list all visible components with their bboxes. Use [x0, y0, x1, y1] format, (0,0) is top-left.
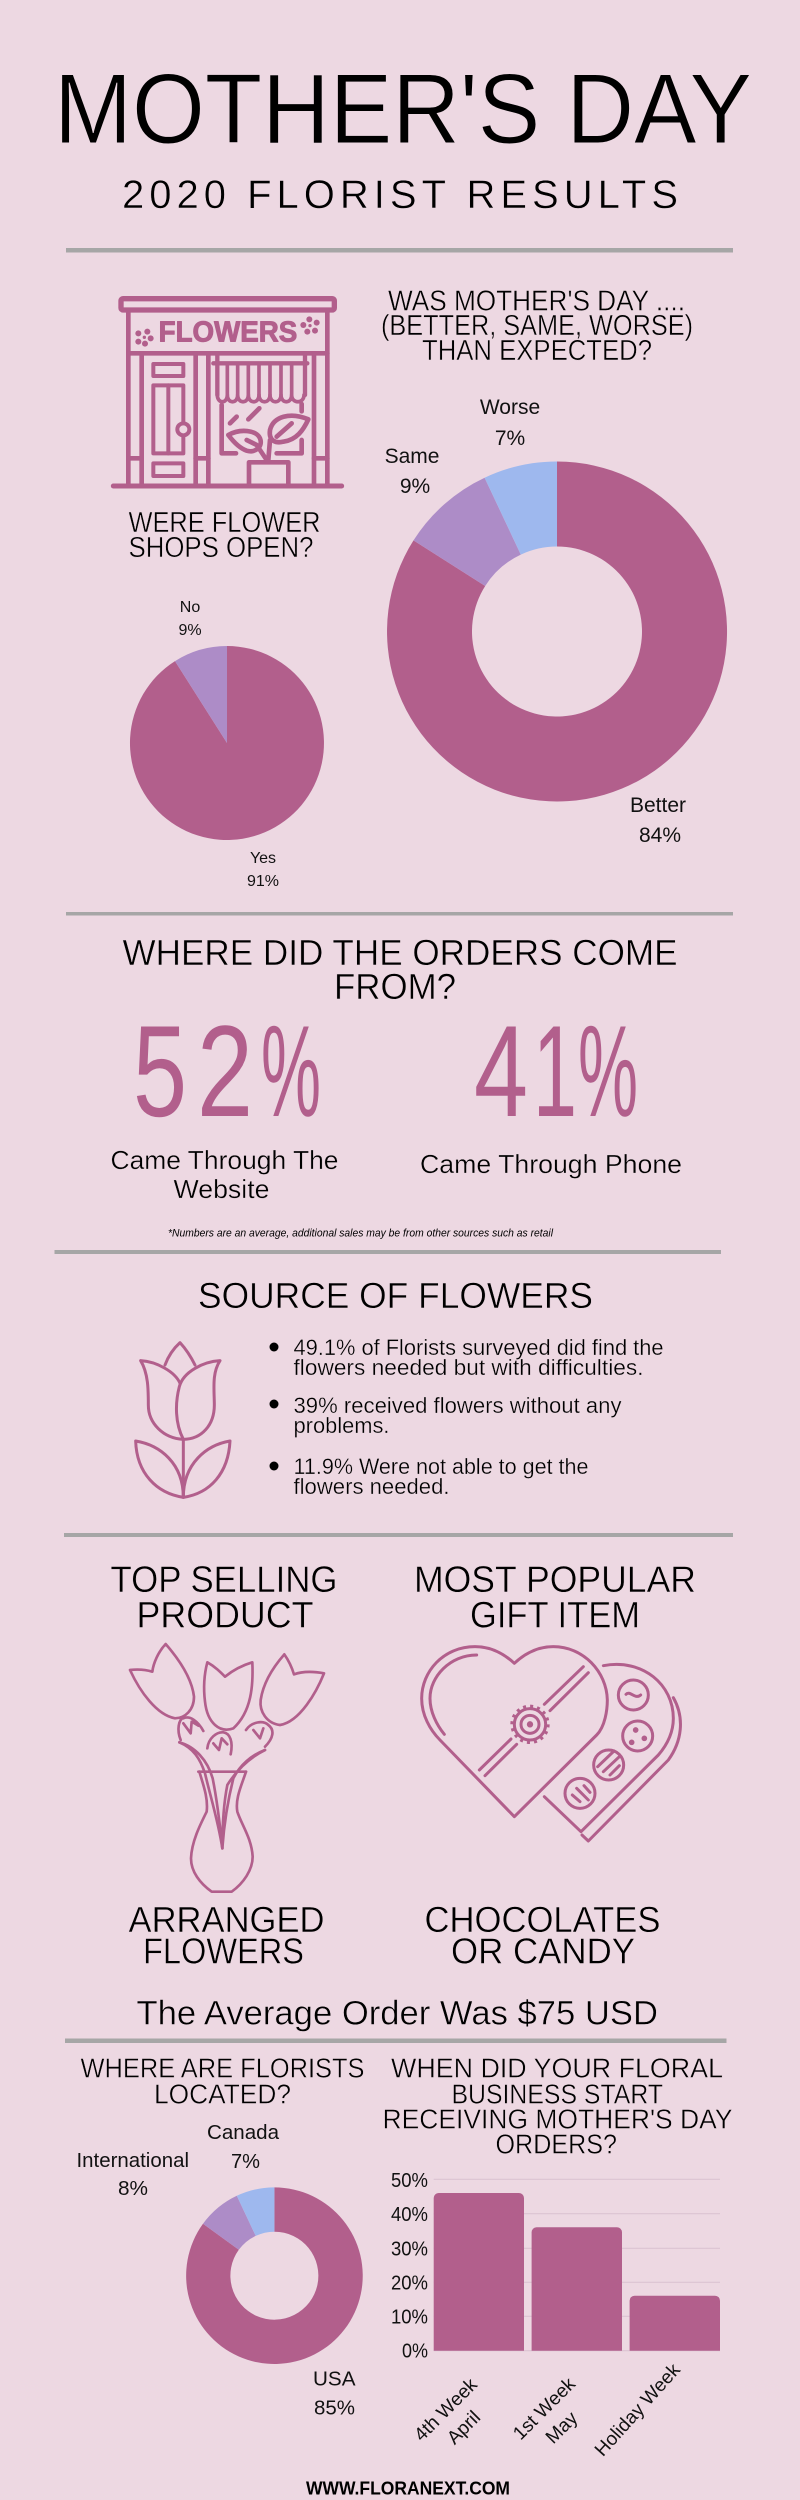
heading: most popular gift item: GIFT ITEM — [470, 1594, 640, 1636]
pie chart: shops open — [130, 599, 324, 890]
label: came through phone: Came Through Phone — [420, 1149, 682, 1179]
donut chart: locations: 7% — [231, 2150, 260, 2173]
bullet list: flowers needed but with difficulties. — [294, 1355, 644, 1380]
heading: when did your floral business start: BUSINESS START — [452, 2078, 663, 2110]
bar chart: 4th Week — [410, 2374, 482, 2446]
panel: when orders started — [382, 2052, 733, 2461]
stat: 41 percent — [474, 998, 638, 1144]
heading: where did the orders come from: FROM? — [334, 966, 456, 1007]
bullet list: 49.1% of Florists surveyed did find the — [294, 1335, 664, 1360]
donut chart: better same worse: 84% — [639, 824, 681, 847]
bullet list: flowers needed. — [294, 1474, 450, 1499]
donut chart: better same worse — [385, 396, 727, 847]
panel: where orders came from — [110, 932, 682, 1240]
bar chart: 30% — [391, 2238, 428, 2260]
label: came through the website: Came Through The — [110, 1145, 338, 1175]
pie chart: shops open: No — [180, 599, 200, 616]
label: arranged flowers: ARRANGED — [128, 1899, 324, 1940]
heading: when did your floral business start: ORDERS? — [496, 2128, 617, 2160]
bar chart: May — [542, 2408, 583, 2448]
pie chart: shops open: Yes — [250, 850, 276, 867]
bullet list: 11.9% Were not able to get the — [294, 1454, 588, 1479]
donut chart: locations — [76, 2121, 363, 2420]
footer url: WWW.FLORANEXT.COM — [306, 2478, 510, 2498]
icon: flower shop: FLOWERS — [159, 316, 297, 348]
bar chart: 1st Week — [509, 2373, 580, 2444]
label: arranged flowers: FLOWERS — [143, 1930, 304, 1972]
heading: where did the orders come from: WHERE DID THE ORDERS COME — [122, 932, 678, 973]
bullet list: problems. — [294, 1413, 390, 1438]
donut chart: locations: 85% — [314, 2396, 355, 2420]
stat: 41 percent: 1 — [533, 998, 577, 1144]
panel: flower shops open — [113, 299, 342, 890]
label: chocolates or candy: OR CANDY — [451, 1930, 635, 1972]
heading: was mother's day: THAN EXPECTED? — [422, 335, 652, 367]
label: arranged flowers — [128, 1899, 324, 1972]
heading: top selling product: PRODUCT — [136, 1594, 314, 1636]
icon: flower shop — [113, 299, 342, 486]
bar chart: April — [443, 2407, 485, 2449]
bullet list — [270, 1335, 664, 1499]
donut chart: better same worse: Better — [630, 794, 686, 817]
heading: when did your floral business start — [382, 2052, 733, 2160]
bar chart: 0% — [402, 2340, 428, 2362]
icon: arranged flowers vase — [130, 1644, 324, 1892]
bar chart — [391, 2170, 720, 2461]
heading: most popular gift item: MOST POPULAR — [414, 1559, 696, 1600]
panel: better same worse — [381, 286, 727, 847]
heading: where are florists located: LOCATED? — [154, 2078, 291, 2110]
panel: source of flowers — [136, 1275, 664, 1499]
title: MOTHER'S DAY — [54, 53, 752, 164]
label: chocolates or candy — [424, 1899, 660, 1972]
donut chart: locations: Canada — [207, 2121, 280, 2144]
label: chocolates or candy: CHOCOLATES — [424, 1899, 660, 1940]
heading: was mother's day — [381, 286, 693, 367]
pie chart: shops open: 9% — [178, 622, 202, 639]
heading: when did your floral business start: WHEN DID YOUR FLORAL — [391, 2052, 723, 2084]
footnote: *Numbers are an average, additional sales may be from other sources such as retail — [168, 1228, 554, 1240]
bar chart: Holiday Week — [591, 2360, 685, 2461]
heading: was mother's day: (BETTER, SAME, WORSE) — [381, 310, 693, 342]
heading: was mother's day: WAS MOTHER'S DAY .... — [388, 286, 685, 318]
donut chart: better same worse: 7% — [495, 427, 525, 450]
heading: were flower shops open: WERE FLOWER — [128, 507, 320, 539]
bullet list: 39% received flowers without any — [294, 1393, 622, 1418]
heading: source of flowers: SOURCE OF FLOWERS — [198, 1275, 593, 1316]
panel: top selling product — [110, 1559, 338, 1972]
stat: 52 percent: 5 — [133, 998, 187, 1144]
donut chart: better same worse: Worse — [480, 396, 540, 419]
heading: were flower shops open — [128, 507, 320, 564]
pie chart: shops open: 91% — [247, 873, 279, 890]
donut chart: locations: International — [76, 2149, 189, 2172]
donut chart: better same worse: Same — [385, 445, 439, 468]
heading: where are florists located — [80, 2052, 364, 2110]
heading: where are florists located: WHERE ARE FLORISTS — [80, 2052, 364, 2084]
bar chart: 40% — [391, 2204, 428, 2226]
donut chart: better same worse: 9% — [400, 475, 430, 498]
subtitle: 2020 FLORIST RESULTS — [122, 173, 678, 217]
heading: top selling product — [110, 1559, 338, 1636]
heading: where did the orders come from — [122, 932, 678, 1007]
stat: 52 percent: 2 — [197, 998, 253, 1144]
panel: most popular gift item — [414, 1559, 696, 1972]
donut chart: locations: USA — [313, 2368, 356, 2390]
label: came through the website — [110, 1145, 338, 1204]
label: came through the website: Website — [174, 1174, 270, 1204]
panel: florist locations — [76, 2052, 364, 2420]
stat: 41 percent: % — [578, 998, 638, 1144]
average order callout: The Average Order Was $75 USD — [136, 1994, 658, 2032]
heading: top selling product: TOP SELLING — [110, 1559, 338, 1600]
bar chart: 10% — [391, 2306, 428, 2328]
bar chart: 20% — [391, 2272, 428, 2294]
donut chart: locations: 8% — [118, 2177, 148, 2200]
icon: tulip — [136, 1343, 230, 1497]
bar chart: 50% — [391, 2170, 428, 2192]
stat: 52 percent: % — [261, 998, 321, 1144]
icon: heart chocolate box — [422, 1647, 680, 1841]
heading: most popular gift item — [414, 1559, 696, 1636]
heading: when did your floral business start: RECEIVING MOTHER'S DAY — [382, 2104, 733, 2134]
stat: 52 percent — [133, 998, 321, 1144]
heading: were flower shops open: SHOPS OPEN? — [128, 532, 314, 564]
stat: 41 percent: 4 — [474, 998, 528, 1144]
